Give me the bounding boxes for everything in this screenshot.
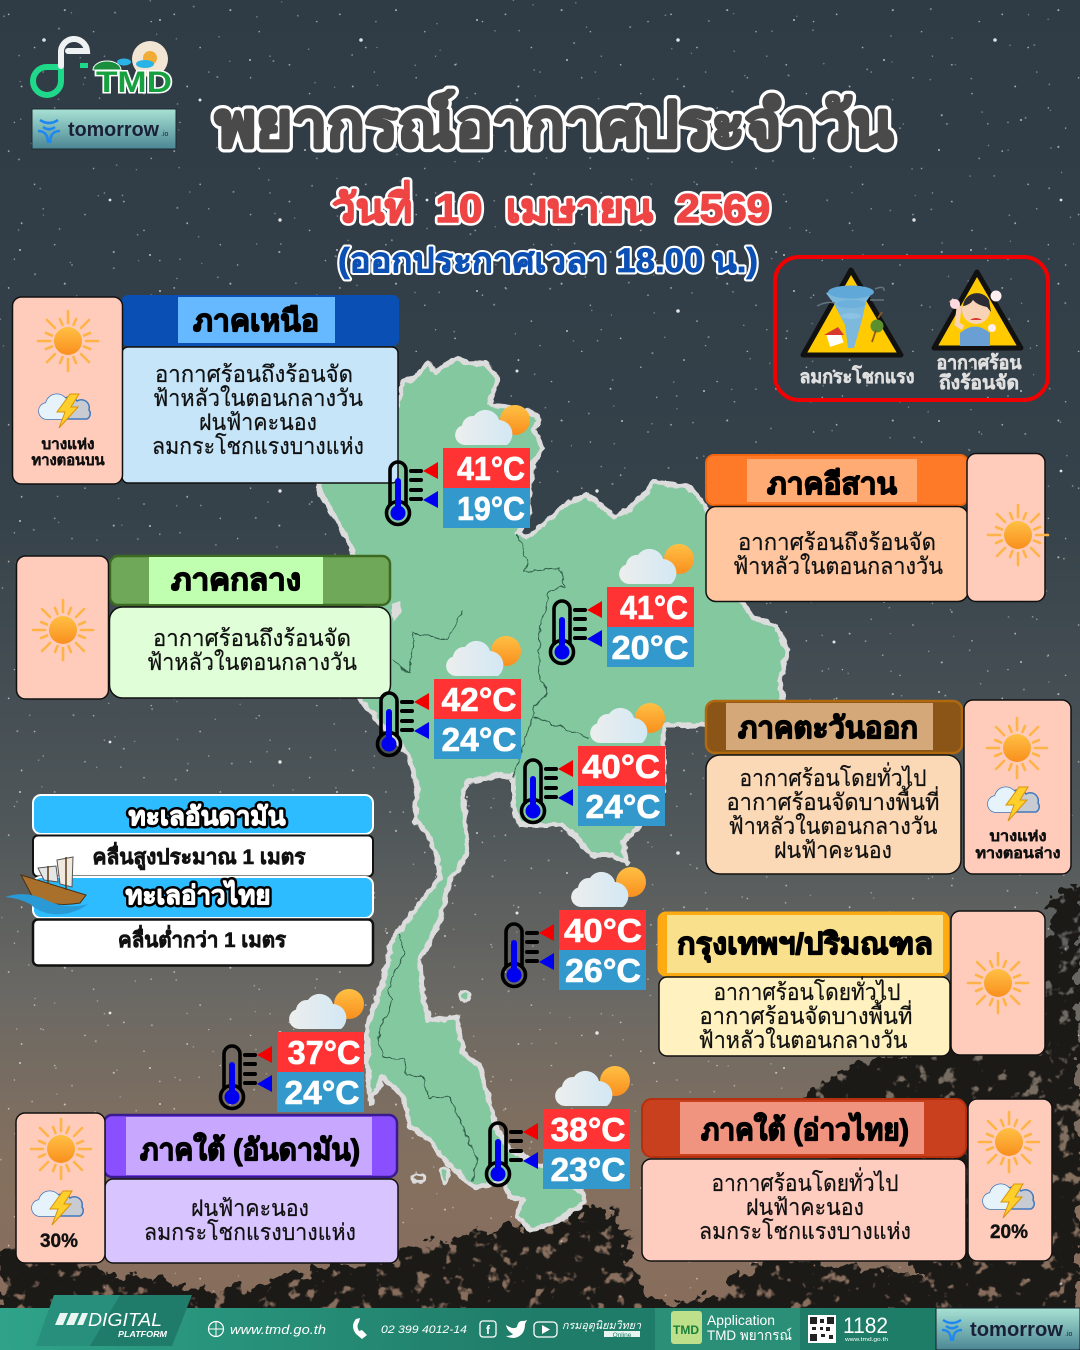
- digital platform badge: DIGITAL: [88, 1310, 162, 1330]
- issue time: (ออกประกาศเวลา 18.00 น.): [338, 242, 758, 280]
- tomorrow.io footer logo: .io: [1065, 1331, 1072, 1338]
- temperature: east: [522, 703, 665, 826]
- text: east storm area: ทางตอนล่าง: [976, 846, 1060, 862]
- text: south gulf rain chance: 20%: [990, 1222, 1028, 1243]
- temperature: south Andaman: 24°C: [284, 1074, 360, 1111]
- text: east forecast: [726, 762, 940, 863]
- temperature: north: 41°C: [457, 450, 525, 487]
- temperature: central: 42°C: [442, 681, 517, 718]
- text: Bangkok forecast: ฟ้าหลัวในตอนกลางวัน: [698, 1027, 908, 1053]
- text: north forecast: ฝนฟ้าคะนอง: [199, 409, 317, 435]
- panel: Bangkok and vicinity: [659, 911, 1045, 1056]
- text: Andaman waves: คลื่นสูงประมาณ 1 เมตร: [92, 841, 306, 871]
- tomorrow.io footer logo: tomorrow: [970, 1319, 1063, 1341]
- logo: tomorrow.io: [32, 109, 176, 149]
- QR code: [808, 1315, 836, 1343]
- heading: east: ภาคตะวันออก: [738, 712, 918, 745]
- logo: tomorrow.io: .io: [161, 131, 168, 138]
- temperature: south gulf: 23°C: [550, 1151, 626, 1188]
- heading: Gulf of Thailand: ทะเลอ่าวไทย: [126, 879, 270, 910]
- temperature: northeast: 20°C: [612, 629, 688, 666]
- TMD online label: กรมอุตุนิยมวิทยา: [562, 1320, 642, 1332]
- text: south Andaman forecast: ฝนฟ้าคะนอง: [191, 1195, 309, 1221]
- text: Bangkok forecast: อากาศร้อนจัดบางพื้นที่: [700, 1000, 912, 1029]
- text: central forecast: [147, 625, 357, 675]
- heading: south gulf: ภาคใต้ (อ่าวไทย): [701, 1112, 909, 1147]
- logo: tomorrow.io: tomorrow: [68, 119, 159, 141]
- text: south gulf forecast: [699, 1167, 911, 1244]
- heading: northeast: ภาคอีสาน: [767, 468, 897, 501]
- heading: Andaman sea: ทะเลอันดามัน: [128, 801, 286, 831]
- title: พยากรณ์อากาศประจำวัน: [215, 90, 893, 160]
- text: Gulf waves: คลื่นต่ำกว่า 1 เมตร: [118, 924, 287, 952]
- text: south gulf forecast: ฝนฟ้าคะนอง: [746, 1194, 864, 1220]
- icon: tornado warning: [803, 270, 901, 355]
- icon: sailing ship: [5, 857, 88, 914]
- heading: central: ภาคกลาง: [171, 564, 301, 597]
- text: north storm area: บางแห่ง: [42, 437, 94, 453]
- digital platform badge: PLATFORM: [118, 1330, 167, 1339]
- date: วันที่ 10 เมษายน 2569: [332, 180, 770, 231]
- phone: 02 399 4012-14: [381, 1324, 467, 1336]
- heading: Andaman sea: ทะเลอันดามัน: [128, 801, 286, 831]
- hotline: 1182: [843, 1313, 888, 1338]
- TMD online label: Online: [613, 1332, 632, 1339]
- tomorrow.io footer logo: [936, 1308, 1080, 1350]
- text: east forecast: อากาศร้อนจัดบางพื้นที่: [726, 786, 940, 815]
- application box: Application: [707, 1312, 775, 1328]
- text: northeast forecast: [733, 529, 943, 579]
- panel: northeast: [706, 454, 1048, 602]
- text: south gulf forecast: อากาศร้อนโดยทั่วไป: [712, 1167, 898, 1196]
- panel: south Gulf of Thailand: [642, 1099, 1052, 1261]
- heading: north: ภาคเหนือ: [193, 305, 319, 338]
- text: north forecast: อากาศร้อนถึงร้อนจัด: [155, 361, 353, 387]
- application box: [655, 1308, 800, 1350]
- text: east forecast: อากาศร้อนโดยทั่วไป: [740, 762, 926, 791]
- text: north forecast: ฟ้าหลัวในตอนกลางวัน: [153, 385, 363, 411]
- temperature: central: 24°C: [442, 721, 517, 758]
- text: northeast forecast: อากาศร้อนถึงร้อนจัด: [738, 529, 936, 555]
- text: east storm area: [976, 829, 1060, 862]
- label: extreme heat: [936, 352, 1022, 394]
- text: south gulf forecast: ลมกระโชกแรงบางแห่ง: [699, 1218, 911, 1244]
- footer bar: [0, 1295, 1080, 1350]
- temperature: south gulf: [486, 1066, 630, 1189]
- text: Andaman rain chance: 30%: [40, 1231, 78, 1252]
- issue time: (ออกประกาศเวลา 18.00 น.): [338, 242, 758, 280]
- temperature: east: 24°C: [586, 788, 661, 825]
- digital platform badge: [36, 1295, 192, 1346]
- application box: TMD พยากรณ์: [707, 1327, 792, 1343]
- heading: Gulf of Thailand: ทะเลอ่าวไทย: [126, 879, 270, 910]
- text: central forecast: ฟ้าหลัวในตอนกลางวัน: [147, 649, 357, 675]
- text: north storm area: [32, 437, 105, 469]
- text: Bangkok forecast: [698, 976, 912, 1053]
- logo: TMD: [93, 41, 172, 99]
- temperature: Bangkok: [502, 867, 646, 990]
- date: วันที่ 10 เมษายน 2569: [332, 180, 770, 231]
- logo: TMD: TMD: [96, 66, 172, 99]
- text: central forecast: อากาศร้อนถึงร้อนจัด: [153, 625, 351, 651]
- temperature: north: 19°C: [457, 490, 525, 527]
- temperature: Bangkok: 26°C: [565, 952, 641, 989]
- temperature: northeast: 41°C: [620, 589, 688, 626]
- text: south Andaman forecast: ลมกระโชกแรงบางแห่ง: [144, 1219, 356, 1245]
- text: east storm area: บางแห่ง: [990, 829, 1046, 845]
- panel: south Andaman: [16, 1113, 398, 1263]
- temperature: central: [378, 636, 521, 759]
- panel: sea conditions: [5, 795, 373, 966]
- text: south Andaman forecast: [144, 1195, 356, 1245]
- hotline: www.tmd.go.th: [844, 1337, 888, 1343]
- label: strong gusts: ลมกระโชกแรง: [800, 365, 914, 388]
- panel: central: [16, 556, 390, 699]
- text: east forecast: ฟ้าหลัวในตอนกลางวัน: [728, 813, 938, 839]
- map of Thailand: [317, 358, 788, 1230]
- icon: extreme heat warning: [934, 272, 1021, 348]
- temperature: south Andaman: [220, 989, 364, 1112]
- social icons: [480, 1320, 557, 1338]
- text: north storm area: ทางตอนบน: [32, 453, 105, 469]
- text: north forecast: [152, 361, 364, 459]
- temperature: northeast: [550, 544, 694, 667]
- warning panel: [775, 257, 1048, 400]
- temperature: east: 40°C: [582, 748, 660, 785]
- panel: east: [706, 700, 1071, 874]
- phone: [353, 1318, 467, 1339]
- application box: TMD: [673, 1323, 699, 1337]
- heading: Bangkok: กรุงเทพฯ/ปริมณฑล: [677, 928, 933, 963]
- text: northeast forecast: ฟ้าหลัวในตอนกลางวัน: [733, 553, 943, 579]
- social icons: f: [486, 1323, 491, 1337]
- text: east forecast: ฝนฟ้าคะนอง: [774, 837, 892, 863]
- temperature: south gulf: 38°C: [550, 1111, 626, 1148]
- temperature: Bangkok: 40°C: [564, 912, 642, 949]
- label: extreme heat: ถึงร้อนจัด: [939, 372, 1019, 394]
- title: พยากรณ์อากาศประจำวัน: [215, 90, 893, 160]
- panel: north: [12, 295, 399, 484]
- label: extreme heat: อากาศร้อน: [936, 352, 1022, 374]
- text: north forecast: ลมกระโชกแรงบางแห่ง: [152, 433, 364, 459]
- temperature: north: [386, 405, 530, 528]
- heading: south Andaman: ภาคใต้ (อันดามัน): [140, 1132, 360, 1167]
- temperature: south Andaman: 37°C: [288, 1034, 360, 1071]
- text: Bangkok forecast: อากาศร้อนโดยทั่วไป: [714, 976, 900, 1005]
- website: www.tmd.go.th: [230, 1322, 326, 1337]
- TMD online label: [562, 1320, 642, 1339]
- logo: Digital e: [33, 39, 88, 95]
